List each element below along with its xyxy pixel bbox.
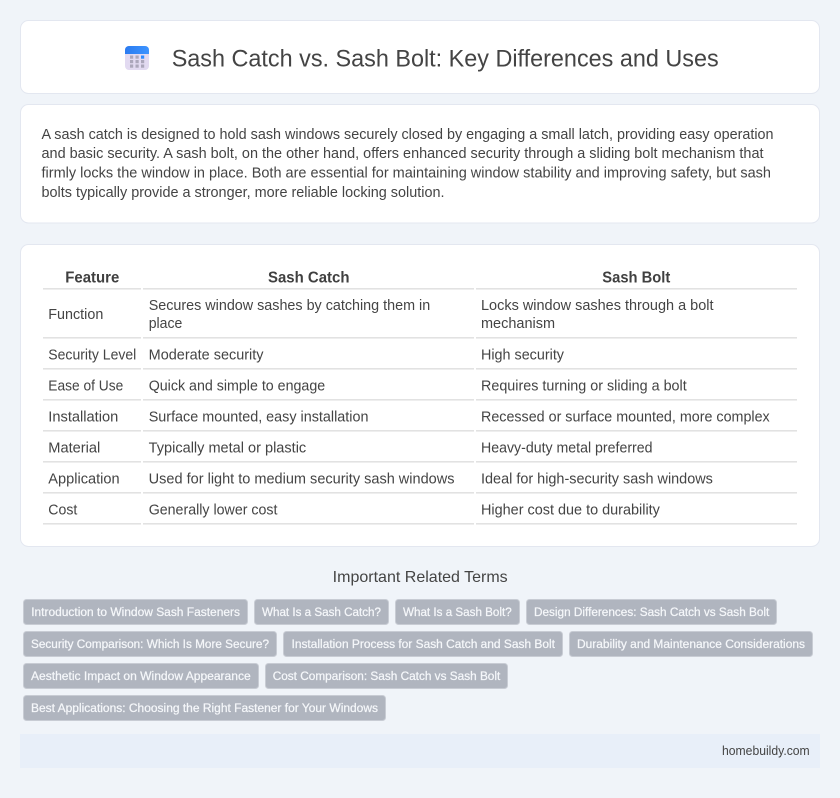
- panel: introduction: [20, 104, 820, 223]
- tag: durability and maintenance: Durability and Maintenance Considerations: [577, 637, 805, 651]
- tag: introduction: Introduction to Window Sash Fasteners: [31, 605, 240, 619]
- table row: Application: Application: [48, 471, 120, 487]
- table row: Function: [43, 298, 797, 339]
- text block: introduction paragraph: bolts typically provide a stronger, more reliable locking solution.: [42, 185, 444, 201]
- panel: comparison table: [20, 244, 820, 546]
- text block: introduction paragraph: firmly locks the window in place. Both are essential for maintaining window stability and improving safety, but sash: [42, 166, 771, 182]
- table row: Material: [43, 440, 797, 463]
- tag: installation process: [284, 632, 562, 656]
- tag: aesthetic impact: [24, 664, 258, 688]
- table row: Installation: Recessed or surface mounted, more complex: [481, 409, 770, 425]
- table row: Ease of Use: [43, 378, 797, 401]
- tag: cost comparison: Cost Comparison: Sash Catch vs Sash Bolt: [273, 669, 501, 683]
- table row: Function: mechanism: [481, 316, 555, 332]
- tag: design differences: [526, 600, 776, 624]
- table row: Installation: [43, 409, 797, 432]
- table header row: Sash Catch: [268, 270, 350, 286]
- icon: calendar grid: [125, 46, 149, 70]
- table header row: Feature: [65, 270, 119, 286]
- table row: Ease of Use: Ease of Use: [48, 378, 123, 394]
- panel: header: [20, 20, 820, 94]
- table row: Security Level: [43, 347, 797, 370]
- table row: Security Level: Moderate security: [149, 347, 264, 363]
- text block: introduction paragraph: [42, 127, 774, 201]
- table row: Cost: Generally lower cost: [149, 502, 278, 518]
- table row: Application: Ideal for high-security sash windows: [481, 471, 713, 487]
- tag: what is a sash catch: [254, 600, 388, 624]
- table row: Cost: Cost: [48, 502, 77, 518]
- tag: cost comparison: [266, 664, 508, 688]
- text block: introduction paragraph: A sash catch is designed to hold sash windows securely closed by engaging a small latch, providing easy operation: [42, 127, 774, 143]
- table row: Material: Heavy-duty metal preferred: [481, 440, 652, 456]
- table row: Ease of Use: Requires turning or sliding a bolt: [481, 378, 687, 394]
- table row: Application: [43, 471, 797, 494]
- table row: Installation: Surface mounted, easy installation: [149, 409, 368, 425]
- tag: best applications: [24, 696, 386, 720]
- table row: Material: Material: [48, 440, 100, 456]
- table row: Installation: Installation: [48, 409, 118, 425]
- tag: design differences: Design Differences: Sash Catch vs Sash Bolt: [534, 605, 770, 619]
- tag: aesthetic impact: Aesthetic Impact on Window Appearance: [31, 669, 251, 683]
- table row: Cost: Higher cost due to durability: [481, 502, 661, 518]
- tag: best applications: Best Applications: Choosing the Right Fastener for Your Windows: [31, 701, 378, 715]
- table header row: Sash Bolt: [602, 270, 671, 286]
- table row: Cost: [43, 502, 797, 525]
- table row: Function: Secures window sashes by catching them in: [149, 298, 430, 314]
- table row: Function: Function: [48, 307, 103, 323]
- table header row: [43, 270, 797, 290]
- table row: Security Level: Security Level: [48, 347, 136, 363]
- related terms tags: [24, 600, 812, 720]
- tag: security comparison: [24, 632, 276, 656]
- footer source text: homebuildy.com: [722, 744, 810, 758]
- tag: security comparison: Security Comparison: Which Is More Secure?: [31, 637, 269, 651]
- title: Sash Catch vs. Sash Bolt: Key Differences and Uses: [172, 46, 719, 72]
- tag: installation process: Installation Process for Sash Catch and Sash Bolt: [292, 637, 556, 651]
- footer bar: [20, 734, 820, 768]
- tag: what is a sash bolt: What Is a Sash Bolt?: [403, 605, 512, 619]
- table row: Material: Typically metal or plastic: [149, 440, 306, 456]
- tag: what is a sash catch: What Is a Sash Catch?: [262, 605, 381, 619]
- tag: what is a sash bolt: [396, 600, 520, 624]
- table row: Application: Used for light to medium security sash windows: [149, 471, 454, 487]
- text block: introduction paragraph: and basic security. A sash bolt, on the other hand, offers enhanced security through a sliding bolt mechanism that: [42, 146, 764, 162]
- tag: durability and maintenance: [570, 632, 812, 656]
- table row: Security Level: High security: [481, 347, 565, 363]
- table row: Function: Locks window sashes through a bolt: [481, 298, 714, 314]
- table row: Ease of Use: Quick and simple to engage: [149, 378, 325, 394]
- table row: Function: place: [149, 316, 182, 332]
- heading: important related terms: Important Related Terms: [333, 569, 508, 586]
- tag: introduction: [24, 600, 248, 624]
